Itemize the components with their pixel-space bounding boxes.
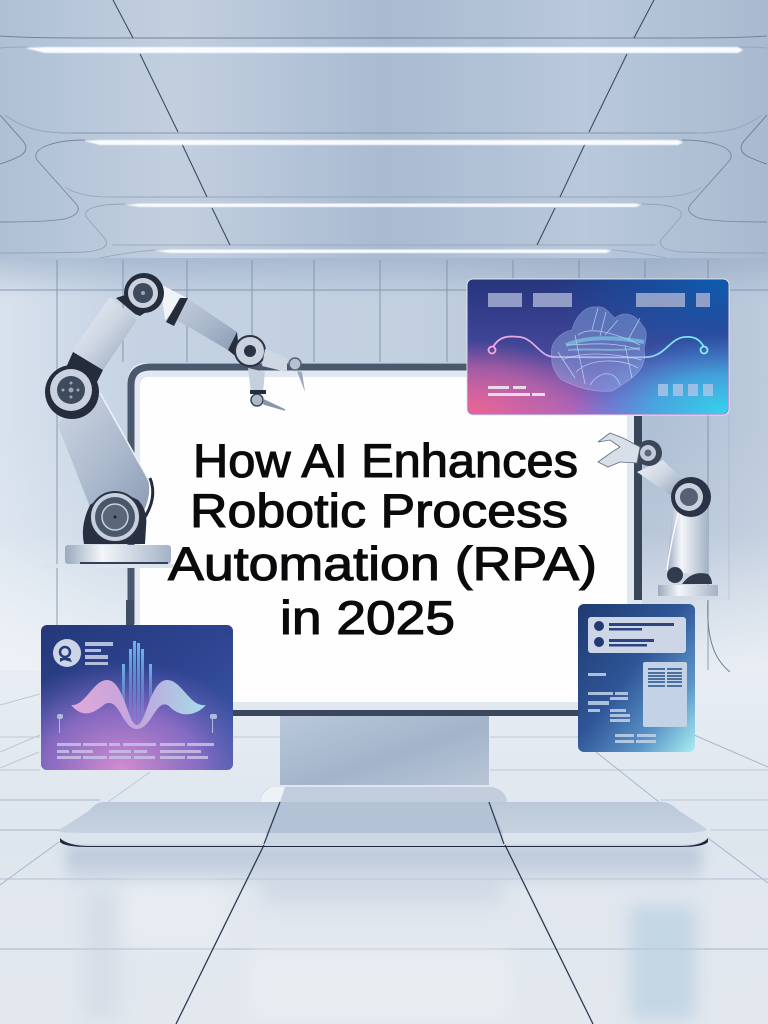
ceiling seams [0,0,767,258]
arm upper link [637,460,683,497]
monitor stand [261,716,507,802]
title [168,434,597,644]
right elbow joint [671,477,711,517]
monitor screen [140,377,627,702]
small squares [658,384,713,396]
brain mesh [551,307,646,391]
robot arm left [42,273,305,568]
wave shape [71,680,206,729]
dashboard card: bottom left wave [41,625,233,770]
platform base [59,802,708,847]
shoulder joint [45,365,99,419]
table panel [643,662,687,727]
monitor frame [126,363,642,716]
right wrist joint [636,440,662,466]
title: Automation (RPA) [168,537,597,590]
badge icon [53,639,81,667]
elbow joint [116,273,164,316]
base pedestal [42,545,180,568]
floor tile lines [0,694,768,949]
markers [57,714,217,733]
caption bars [488,386,545,396]
header chips [488,293,710,307]
title: Robotic Process [190,484,568,537]
vertical bars [122,641,152,728]
right gripper [598,433,640,467]
dashboard card: top right neural [467,279,729,415]
ceiling light strips [25,47,743,253]
title: in 2025 [280,591,455,644]
arm lower link [667,503,708,577]
signal wave [488,336,708,357]
text bars [57,743,214,759]
base motors [667,567,712,584]
floor perspective seams [176,845,593,1024]
floor reflections [66,846,702,1020]
title: How AI Enhances [193,434,578,487]
profile list panel [588,617,686,653]
forearm link [163,287,237,350]
form bars [588,673,656,743]
cable [708,600,730,672]
base pedestal [653,585,727,600]
wall grid lines [0,260,768,672]
legend bars [85,642,113,665]
upper arm link [73,297,137,370]
dashboard card: bottom right profile [578,604,695,752]
base joint [83,492,146,544]
wrist joint [228,332,265,366]
gripper [248,349,305,410]
robot arm right [598,433,727,600]
lower arm link [57,393,149,513]
